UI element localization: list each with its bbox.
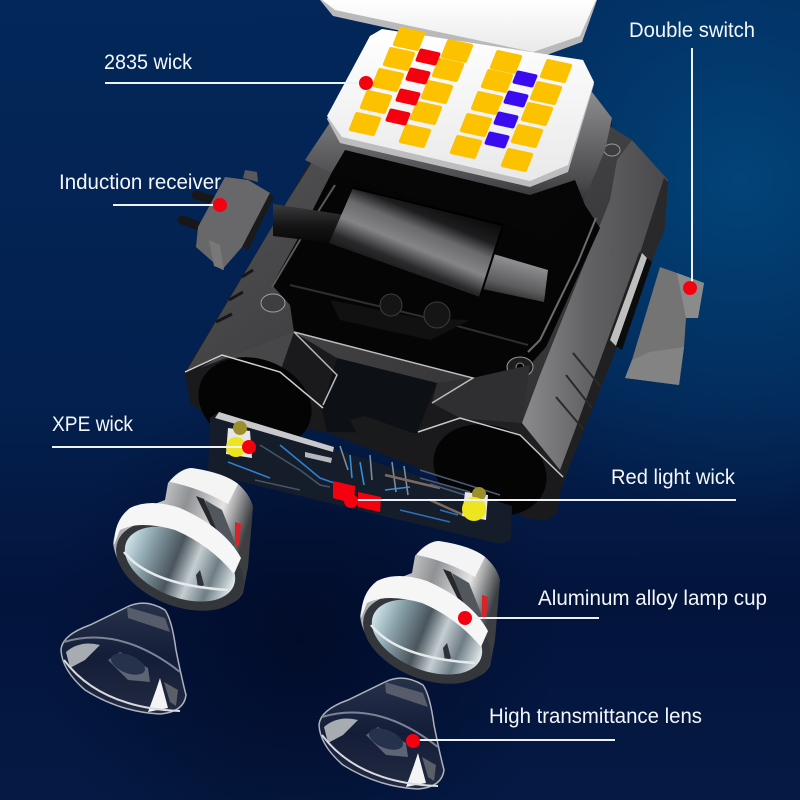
aluminum lamp cup, left [103,468,257,628]
callout: red light wick [344,466,736,508]
LED board: 2835 wick [327,27,594,187]
right dark edge [640,178,668,292]
LED strip circuit board [208,412,512,544]
amber LEDs [348,27,573,172]
hinge bar left [273,204,345,248]
callout: red light wick: Red light wick [611,466,735,489]
top face [186,110,640,423]
induction receiver part [182,170,274,270]
left lamp hole [185,342,325,464]
double switch part [625,267,704,385]
callout: high transmittance lens: High transmittance lens [489,705,702,728]
black band under board [332,150,585,240]
callout: aluminum alloy lamp cup [458,587,767,625]
front housing [185,332,563,520]
right side strip [522,140,668,470]
headlamp body [185,92,668,531]
centre recess [322,358,437,433]
screw top right [604,144,620,156]
left vents [216,270,253,322]
bright edges [185,355,323,408]
callout: high transmittance lens [406,705,702,748]
circuit traces [228,445,500,522]
top white cover plate [320,0,597,60]
hinge cover [329,188,503,297]
callout: double switch: Double switch [629,19,755,42]
mounting screws [261,294,285,312]
lens, right [319,678,444,789]
white top edge [215,412,334,452]
board surface [327,29,594,181]
callout: 2835 wick: 2835 wick [104,51,192,74]
board edge [327,30,594,187]
hinge bar right [478,250,548,302]
right vents [556,353,601,430]
black cavity [272,172,600,378]
right XPE LED [462,492,488,520]
small screws in cavity [380,294,402,316]
left XPE LED [226,428,252,458]
callout: XPE wick: XPE wick [52,413,133,436]
right lamp hole [420,409,560,531]
red LEDs [385,48,441,126]
callout: XPE wick [52,413,256,454]
right window slot [610,253,647,346]
callout: induction receiver [59,171,227,212]
callout: induction receiver: Induction receiver [59,171,221,194]
red LEDs on strip [333,481,355,504]
blue LEDs [484,70,538,149]
gloss tray behind board [305,92,612,240]
lens, left [61,603,186,714]
callout: 2835 wick [104,51,373,90]
callout: aluminum alloy lamp cup: Aluminum alloy lamp cup [538,587,767,610]
body silhouette [185,92,668,520]
callout: double switch [629,19,755,295]
aluminum lamp cup, right [350,541,504,701]
